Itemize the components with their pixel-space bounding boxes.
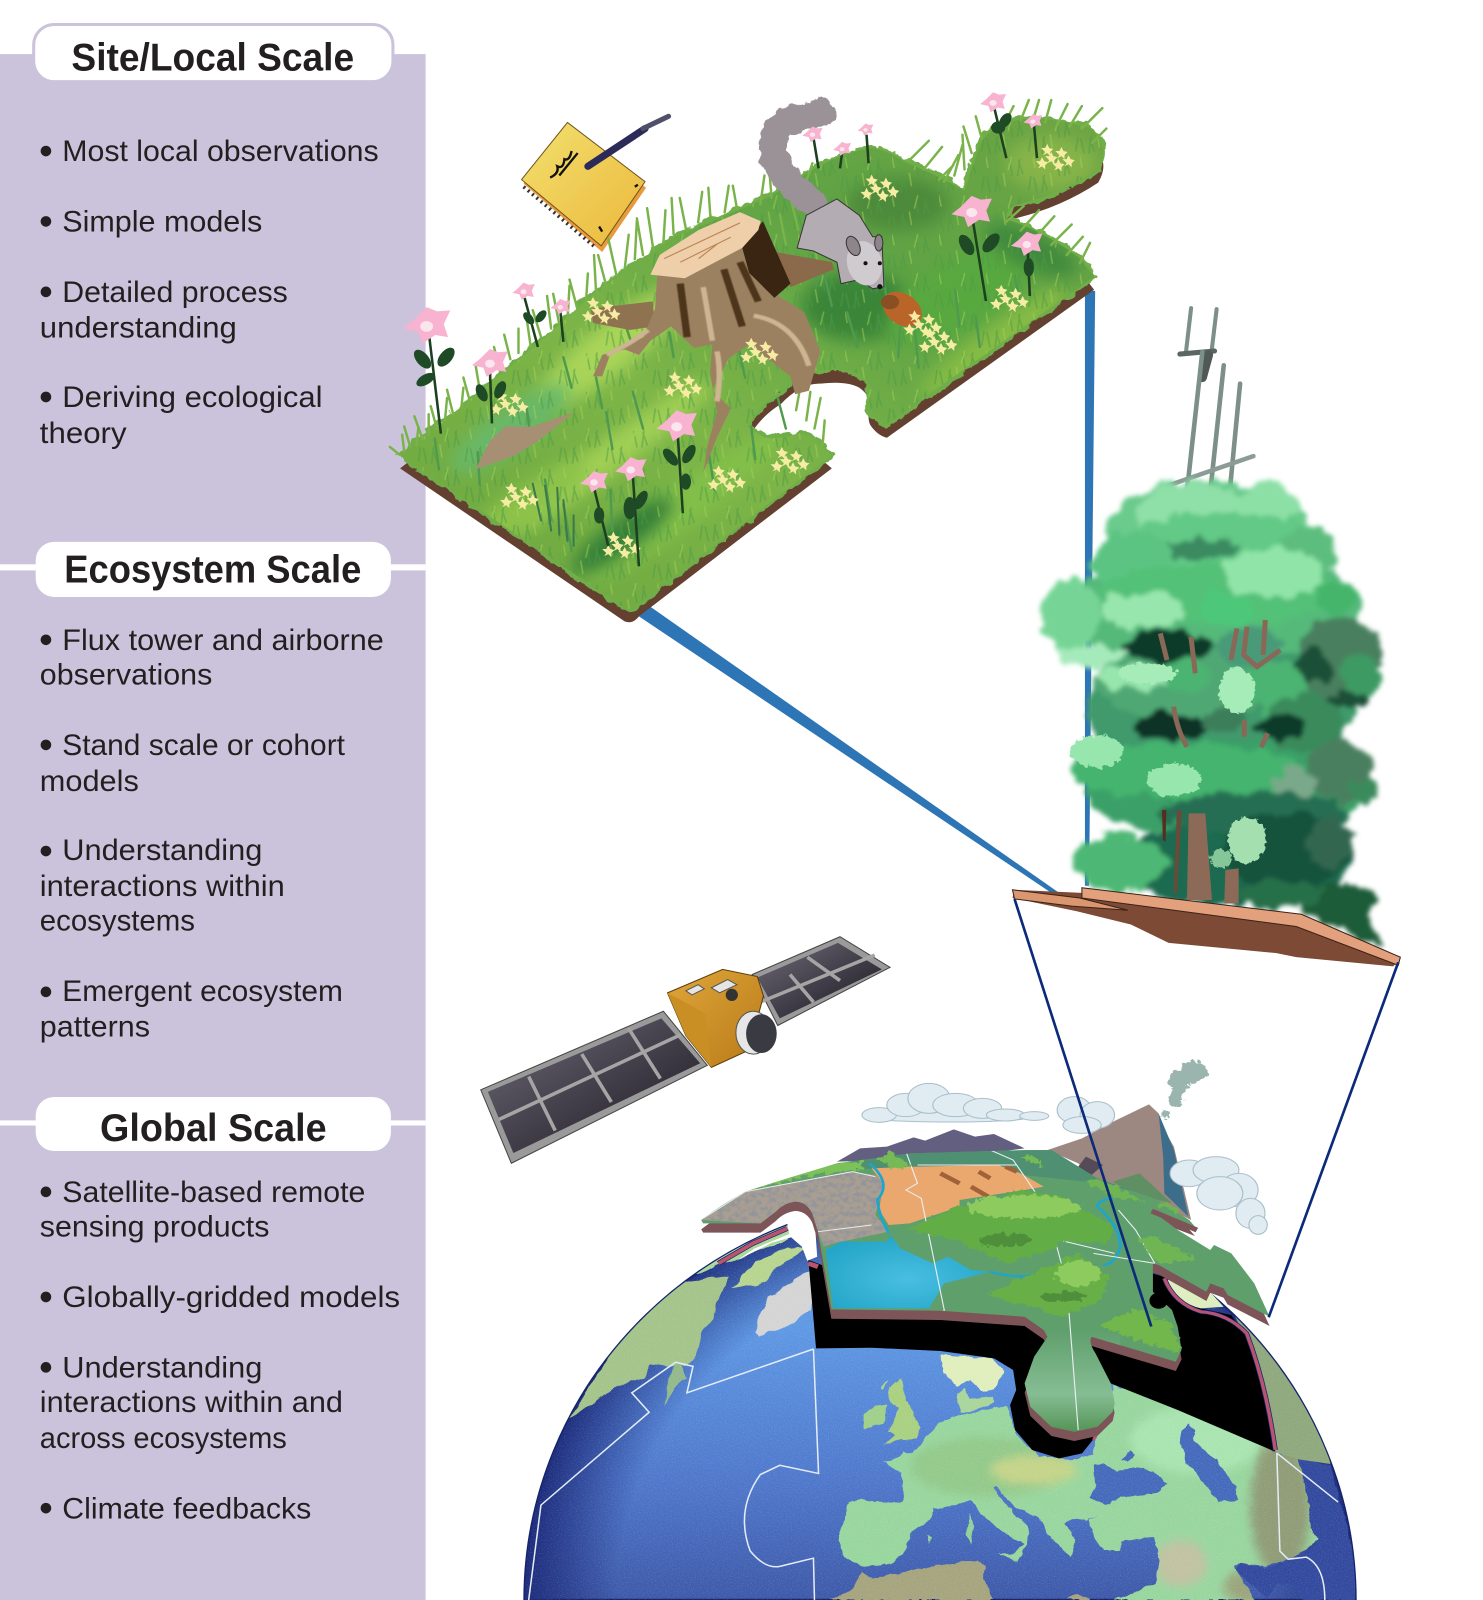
text block: site scale bullets (40, 135, 379, 450)
highlight leaf clusters (1070, 663, 1266, 868)
solar panel right (752, 937, 890, 1026)
heading: Site/Local Scale (34, 24, 393, 82)
text block: ecosystem scale bullets: Understanding (62, 834, 262, 867)
panel: scale sidebar (0, 24, 426, 1600)
pale land inside notch (1166, 1280, 1224, 1308)
text block: site scale bullets: theory (40, 417, 127, 450)
piece terrain (701, 1150, 1155, 1437)
illustration: lifted globe puzzle piece group (701, 1061, 1275, 1458)
puzzle seams on piece (703, 1150, 1155, 1430)
limb land strip (1235, 1316, 1330, 1464)
trunks and branches (1160, 620, 1280, 903)
fallen root (476, 412, 575, 469)
illustration: globe (525, 1197, 1355, 1600)
bushes (877, 1152, 1197, 1352)
text block: site scale bullets: Deriving ecological (62, 381, 323, 414)
text block: ecosystem scale bullets: Stand scale or cohort (62, 729, 345, 762)
tree stump (591, 212, 834, 473)
text block: ecosystem scale bullets: models (40, 765, 139, 798)
text block: global scale bullets: sensing products (40, 1211, 269, 1244)
text block: site scale bullets: Most local observations (62, 135, 379, 168)
long cloud (862, 1083, 1049, 1122)
puzzle seams on globe (529, 1349, 1338, 1600)
grass surface (400, 119, 1103, 609)
text block: global scale bullets: interactions within and (40, 1386, 343, 1419)
text block: ecosystem scale bullets: Emergent ecosystem (62, 975, 343, 1008)
solar panel left (481, 1011, 707, 1163)
green strip on rear edge (745, 1162, 864, 1192)
desert zone (872, 1165, 1044, 1225)
soil edge (400, 132, 1103, 622)
cavity under lifted piece (808, 1260, 1275, 1458)
rocky mosaic zone (701, 1172, 889, 1247)
lake (826, 1235, 990, 1308)
illustration: satellite (481, 937, 890, 1163)
mountains (837, 1129, 1025, 1162)
text block: ecosystem scale bullets: observations (40, 659, 212, 692)
globe continents (570, 1219, 1355, 1600)
volcano smoke (1163, 1061, 1208, 1119)
text block: ecosystem scale bullets (40, 624, 384, 1044)
text block: ecosystem scale bullets: Flux tower and airborne (62, 624, 384, 657)
icon: notebook and pen (522, 116, 669, 252)
globe grain texture (525, 1201, 1355, 1600)
illustration: flux tower (1165, 308, 1253, 500)
cut edges on globe (718, 1228, 1275, 1450)
europe and africa (814, 1307, 1355, 1600)
piece edge (701, 1159, 1270, 1441)
heading: Global Scale (36, 1097, 391, 1151)
small cloud (1057, 1097, 1115, 1133)
canopy foliage (1041, 482, 1382, 947)
text block: global scale bullets (40, 1176, 400, 1525)
heading: Ecosystem Scale: Ecosystem Scale (64, 549, 361, 592)
heading: Ecosystem Scale (36, 542, 391, 597)
text block: ecosystem scale bullets: patterns (40, 1011, 150, 1044)
volcano (1048, 1104, 1191, 1220)
heading: Global Scale: Global Scale (100, 1107, 327, 1150)
text block: global scale bullets: Satellite-based remote (62, 1176, 365, 1209)
white gap between piece and globe (738, 1210, 817, 1261)
piece surface (701, 1150, 1270, 1432)
text block: site scale bullets: Simple models (62, 206, 262, 239)
satellite body (668, 969, 777, 1067)
text block: ecosystem scale bullets: interactions within (40, 870, 285, 903)
text block: global scale bullets: Climate feedbacks (62, 1492, 311, 1525)
text block: global scale bullets: Globally-gridded models (62, 1281, 400, 1314)
text block: ecosystem scale bullets: ecosystems (40, 905, 195, 938)
grass shading (388, 112, 1102, 622)
illustration: ecosystem tile base (1012, 888, 1400, 966)
illustration: forest canopy (1041, 482, 1382, 947)
heading: Site/Local Scale: Site/Local Scale (71, 36, 354, 79)
text block: global scale bullets: Understanding (62, 1352, 262, 1385)
grass fringe (400, 119, 1103, 609)
floating edge strip (1152, 1211, 1197, 1230)
illustration: local site puzzle piece (388, 92, 1106, 622)
clouds (862, 1083, 1267, 1234)
pink flowers (403, 92, 1042, 566)
grass blades (390, 100, 1106, 455)
squirrel (773, 112, 887, 289)
arrow: blue connector lines from local tile to ecosystem tile (630, 291, 1095, 897)
acorn (876, 284, 929, 334)
rivers (870, 1163, 1120, 1276)
black notch at line end (1149, 1293, 1168, 1309)
text block: global scale bullets: across ecosystems (40, 1422, 287, 1455)
arrow: navy connector lines from ecosystem tile to globe piece (1015, 899, 1398, 1327)
small yellow flowers (490, 144, 1075, 559)
text block: site scale bullets: Detailed process (62, 276, 288, 309)
north atlantic land (570, 1219, 813, 1418)
right cloud (1170, 1157, 1267, 1234)
text block: site scale bullets: understanding (40, 312, 237, 345)
